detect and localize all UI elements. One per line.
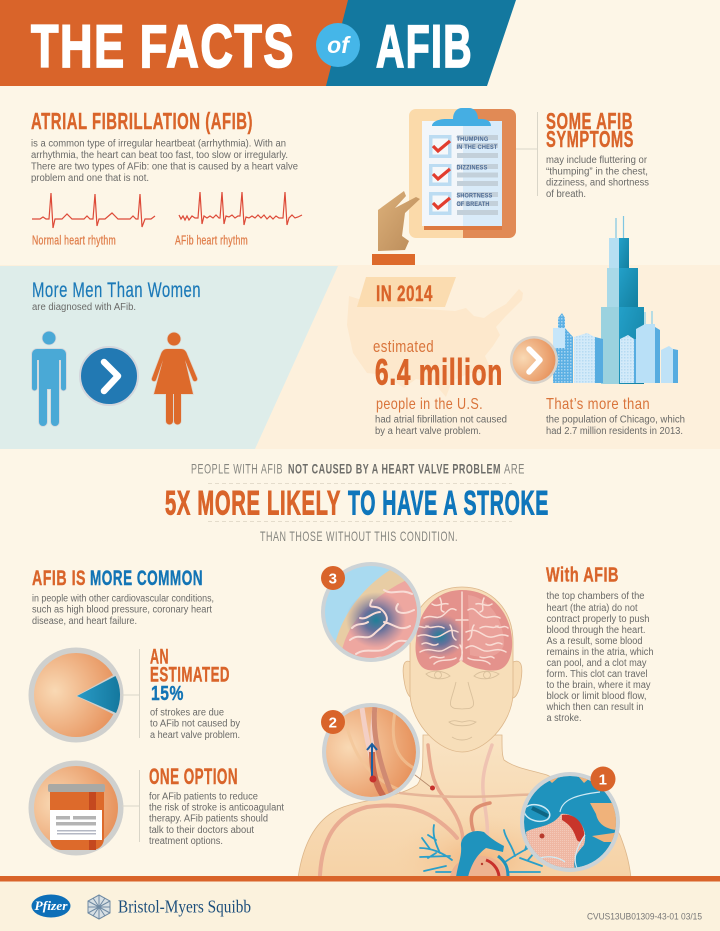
facial features	[426, 671, 499, 740]
brain	[415, 590, 512, 671]
body: of strokes are due	[150, 708, 225, 718]
bottle label	[50, 810, 102, 840]
definition text: There are two types of AFib: one that is caused by a heart valve	[31, 162, 299, 172]
head	[410, 587, 513, 752]
definition text	[31, 138, 299, 184]
panel background: teal band	[0, 266, 338, 449]
body: can pool, and a clot may	[546, 658, 647, 669]
heart tissue	[526, 814, 585, 870]
heading: ONE OPTION	[149, 764, 238, 789]
hand	[378, 191, 420, 251]
body: remains in the atria, which	[546, 647, 654, 658]
map of U.S.	[347, 289, 523, 397]
badge: number 3: 3	[329, 570, 337, 588]
body	[149, 792, 284, 847]
checklist item: thumping: THUMPING	[456, 137, 489, 143]
body: talk to their doctors about	[149, 825, 254, 836]
valve	[524, 804, 550, 822]
logo: Pfizer: Pfizer	[34, 898, 68, 913]
panel background: peach band	[0, 265, 720, 449]
heading: That’s more than	[546, 396, 650, 413]
icon: orange arrow circle	[510, 336, 558, 384]
title text: AFib: AFIB	[376, 13, 473, 80]
panel: symptoms	[516, 108, 649, 200]
body: therapy. AFib patients should	[149, 814, 268, 824]
clot dot	[540, 834, 544, 838]
body: which then can result in	[546, 702, 644, 713]
ears	[403, 661, 522, 698]
badge: number 3	[321, 566, 345, 590]
symptoms text: may include fluttering or	[546, 155, 648, 166]
footer rule	[0, 876, 720, 882]
banner: blue	[326, 0, 516, 86]
icon: woman	[152, 332, 197, 425]
icon: arrow circle	[80, 347, 138, 405]
body: blood through the heart.	[546, 625, 646, 636]
heading: AN	[150, 646, 169, 668]
body	[546, 414, 685, 437]
badge: number 1	[590, 766, 616, 792]
icon: of circle: of	[327, 32, 351, 58]
definition text: problem and one that is not.	[31, 173, 149, 184]
body: form. This clot can travel	[546, 669, 648, 680]
heading: MORE COMMON	[90, 566, 203, 590]
body text: had atrial fibrillation not caused	[375, 414, 507, 426]
body: in people with other cardiovascular conditions,	[32, 594, 214, 604]
chest shading	[427, 830, 533, 876]
lungs	[420, 825, 542, 872]
heading: More Men Than Women	[32, 279, 201, 302]
document code: CVUS13UB01309-43-01 03/15	[587, 912, 702, 922]
skyscraper	[601, 216, 644, 384]
footer background	[0, 881, 720, 931]
icon: man	[32, 332, 66, 426]
heading	[32, 566, 203, 590]
panel: AFib is more common	[32, 566, 214, 627]
heading: SOME AFIB	[546, 108, 633, 134]
chart: AFib heart rhythm trace	[179, 192, 302, 225]
body: disease, and heart failure.	[32, 616, 137, 627]
panel: estimated 15 percent	[122, 646, 240, 741]
building fifth	[661, 346, 678, 383]
cuff	[372, 254, 415, 265]
illustration: human figure with circulation	[298, 587, 631, 895]
closing line: THAN THOSE WITHOUT THIS CONDITION.	[260, 528, 458, 544]
panel: more men than women	[32, 279, 201, 426]
text: estimated: estimated	[373, 337, 434, 356]
subheading: are diagnosed with AFib.	[32, 302, 136, 313]
heading: With AFIB	[546, 564, 619, 586]
panel: Chicago comparison text	[546, 396, 685, 437]
checklist item: dizziness	[429, 164, 498, 186]
heading: AFIB IS	[32, 566, 86, 590]
torso	[298, 735, 631, 878]
panel: one option	[122, 764, 284, 847]
heading: ATRIAL FIBRILLATION (AFIB)	[31, 108, 253, 134]
headline: 5X MORE LIKELY	[165, 484, 341, 522]
heading: ESTIMATED	[150, 664, 230, 686]
arteries	[320, 745, 552, 875]
callout: heart detail circle	[520, 772, 620, 872]
brain folds	[416, 592, 508, 664]
bottle cap	[48, 784, 105, 792]
building left	[553, 313, 573, 383]
building third	[620, 335, 638, 383]
checklist item: shortness of breath: SHORTNESS	[456, 194, 492, 200]
headline: TO HAVE A STROKE	[348, 484, 549, 522]
footer	[0, 876, 720, 931]
tag: In 2014	[357, 277, 456, 307]
chart: normal heart rhythm trace	[32, 193, 155, 228]
bottom dotted rule	[208, 520, 512, 522]
text: people in the U.S.: people in the U.S.	[376, 396, 483, 413]
panel: in 2014 statistic	[347, 277, 523, 437]
checklist item: shortness of breath	[429, 192, 498, 215]
title banner	[0, 0, 516, 86]
clipboard board	[409, 108, 516, 238]
badge: number 1: 1	[599, 772, 607, 788]
title text: The Facts: THE FACTS	[31, 13, 295, 80]
callout: brain detail circle	[321, 562, 425, 662]
caption: normal rhythm: Normal heart rhythm	[32, 234, 116, 248]
body: the population of Chicago, which	[546, 414, 685, 426]
body: to AFib not caused by	[150, 718, 240, 730]
brain folds detail	[350, 590, 414, 660]
connector	[516, 112, 538, 196]
heading: SYMPTOMS	[546, 126, 634, 152]
body: a heart valve problem.	[150, 730, 240, 741]
body: the risk of stroke is anticoagulant	[149, 802, 284, 814]
lead-in line: ARE	[504, 460, 525, 476]
checklist item: thumping: IN THE CHEST	[456, 145, 498, 151]
definition text: is a common type of irregular heartbeat (arrhythmia). With an	[31, 138, 286, 150]
symptoms text: of breath.	[546, 189, 586, 200]
body: heart (the atria) do not	[546, 603, 638, 614]
tag text: IN 2014	[376, 281, 433, 306]
body: such as high blood pressure, coronary heart	[32, 604, 212, 616]
body text: by a heart valve problem.	[375, 426, 481, 437]
illustration: clipboard with hand	[372, 108, 516, 265]
logo: Pfizer	[32, 894, 70, 918]
callout: artery detail circle	[322, 703, 420, 801]
body	[32, 594, 214, 627]
connector	[122, 770, 140, 842]
clot	[370, 776, 376, 782]
body: contract properly to push	[546, 614, 650, 625]
symptoms text: dizziness, and shortness	[546, 178, 649, 188]
banner: orange	[0, 0, 350, 86]
illustration: Chicago skyline	[553, 216, 678, 384]
checklist item: dizziness: DIZZINESS	[456, 166, 488, 172]
icon: medicine bottle	[28, 760, 124, 856]
icon: of circle	[316, 23, 360, 67]
definition text: arrhythmia, the heart can beat too fast, too slow or irregularly.	[31, 150, 288, 161]
pie slice	[76, 673, 122, 716]
heading	[546, 108, 634, 152]
logo: Bristol-Myers Squibb mark	[88, 895, 110, 919]
checklist item: shortness of breath: OF BREATH	[456, 202, 490, 208]
symptoms text: “thumping” in the chest,	[546, 166, 648, 178]
building second	[574, 333, 603, 383]
checklist item: thumping	[429, 135, 498, 158]
badge: number 2	[321, 710, 345, 734]
lead-in line: NOT CAUSED BY A HEART VALVE PROBLEM	[288, 460, 501, 476]
building fourth	[636, 311, 660, 383]
top dotted rule	[208, 482, 512, 484]
body: had 2.7 million residents in 2013.	[546, 426, 683, 437]
body: As a result, some blood	[546, 636, 642, 647]
pie slice: 15 percent	[77, 676, 120, 713]
figure: 15 percent: 15%	[151, 683, 184, 705]
body	[546, 591, 654, 724]
logo: Bristol-Myers Squibb wordmark: Bristol-Myers Squibb	[118, 896, 251, 916]
lead-in line	[191, 460, 525, 476]
panel: stroke risk statement	[165, 460, 549, 544]
heart	[450, 831, 508, 877]
panel: atrial fibrillation definition	[31, 108, 302, 248]
body: the top chambers of the	[546, 591, 645, 602]
body: treatment options.	[149, 836, 223, 847]
heading	[150, 646, 230, 686]
body: for AFib patients to reduce	[149, 792, 259, 802]
connector	[122, 649, 140, 738]
body: to the brain, where it may	[546, 680, 651, 691]
symptoms text	[546, 155, 649, 200]
panel: with AFib	[546, 564, 654, 724]
arrow: clot upward	[367, 744, 377, 778]
clot dot	[430, 786, 435, 790]
lead-in line: PEOPLE WITH AFIB	[191, 460, 283, 476]
badge: number 2: 2	[329, 714, 337, 732]
body	[150, 708, 240, 741]
caption: AFib rhythm: AFib heart rhythm	[175, 234, 248, 248]
body: a stroke.	[546, 713, 582, 724]
body: block or limit blood flow,	[546, 691, 646, 702]
bottle body	[50, 792, 104, 850]
body text	[375, 414, 507, 437]
chart: 15 percent pie	[28, 648, 124, 742]
big number: 6.4 million: 6.4 million	[375, 352, 503, 392]
